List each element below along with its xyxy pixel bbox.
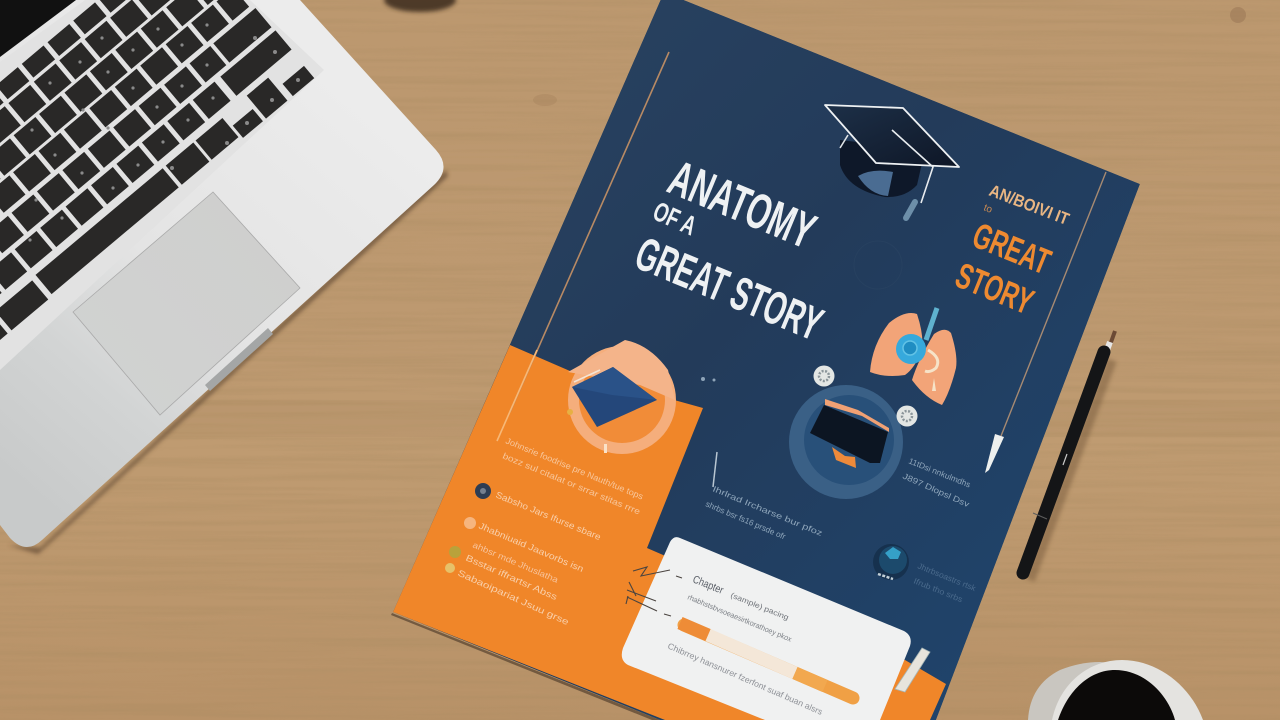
- keyboard well: [0, 0, 324, 370]
- navy background: [393, 0, 1140, 720]
- laptop shadow: [8, 170, 448, 554]
- orange text block: bozz sul citalat or srrar stitas rrre: [501, 451, 642, 517]
- secondary heading: [956, 186, 1070, 313]
- icon: white dot right: [896, 406, 918, 426]
- right vertical rule: [1001, 172, 1106, 436]
- coffee: [1058, 670, 1175, 720]
- orange bullet list: [445, 483, 602, 627]
- orange bullet list: Bsstar iffrartsr Abss: [464, 553, 559, 602]
- navy text blocks: J897 Dlopsl Dsv: [901, 472, 972, 510]
- icon: coffee cup: [1028, 660, 1203, 720]
- navy text blocks: Ihrlrad Ircharse bur pfoz: [711, 485, 824, 538]
- trackpad: [73, 192, 300, 415]
- icon: graduation cap: [824, 104, 960, 221]
- title: GREAT STORY: [628, 226, 830, 351]
- navy text blocks: Jhtrbsoastrs rtsk: [916, 562, 978, 593]
- small stroke icon: [713, 452, 717, 487]
- secondary heading: to: [982, 203, 994, 216]
- icon: small dark circle: [873, 544, 909, 580]
- navy text blocks: [704, 457, 978, 604]
- card caption: Chibrrey hansnurer fzerfont suaf buan alsrs: [666, 641, 824, 717]
- poster shadow: [391, 613, 660, 720]
- keys: [0, 0, 310, 361]
- navy text blocks: shrbs bsr fs16 prsde ofr: [704, 500, 787, 542]
- icon: white dot left: [814, 366, 834, 386]
- white card: [622, 537, 911, 720]
- orange bullet list: Sabsho Jars Ifurse sbare: [494, 490, 602, 542]
- scribble arrows: [626, 567, 682, 616]
- navy text blocks: 11tDsi nnkulmdhs: [907, 457, 972, 490]
- icon: lower blue circle with book: [789, 385, 903, 499]
- left rule on orange: [497, 350, 537, 441]
- small dots near circle: [701, 377, 716, 382]
- orange panel: [393, 345, 946, 720]
- cup body: [1028, 662, 1130, 720]
- orange bullet list: ahbsr mde Jhuslatha: [471, 540, 560, 585]
- laptop body: [0, 0, 444, 547]
- pen clip on card: [895, 648, 930, 692]
- progress bar: [680, 623, 853, 698]
- icon: orange circle with book: [567, 340, 676, 454]
- poster: [393, 0, 1140, 720]
- secondary heading: GREAT: [967, 214, 1057, 282]
- laptop keyboard: [0, 0, 324, 370]
- laptop: [0, 0, 448, 554]
- card heading: Chapter: [691, 574, 725, 597]
- left vertical rule: [510, 52, 669, 412]
- cup rim: [1052, 660, 1203, 720]
- secondary heading: STORY: [950, 254, 1040, 322]
- navy text blocks: Ifrub tho srbs: [912, 577, 964, 604]
- orange bullet list: Sabaoipariat Jsuu grse: [456, 568, 570, 627]
- orange bullet list: Jhabniuaid Jaavorbs isn: [477, 521, 585, 574]
- orange text block: Johnsrie foodrise pre Nauth/tue tops: [504, 436, 645, 501]
- title: OF A: [649, 196, 701, 241]
- card subheading: (sample) pacing: [729, 591, 790, 622]
- secondary heading: AN/BOIVI IT: [987, 181, 1072, 229]
- icon: black pen: [1023, 331, 1115, 580]
- key legends: [28, 23, 300, 242]
- icon: lungs: [870, 308, 956, 405]
- title: ANATOMY: [661, 149, 824, 260]
- card text line: rhabhstsbvsoeaesirtkorathoey pkox: [686, 593, 793, 644]
- icon: white pen tip: [985, 434, 1004, 473]
- screen hinge: [0, 0, 76, 57]
- title: [636, 162, 826, 338]
- hinge notch: [205, 328, 273, 391]
